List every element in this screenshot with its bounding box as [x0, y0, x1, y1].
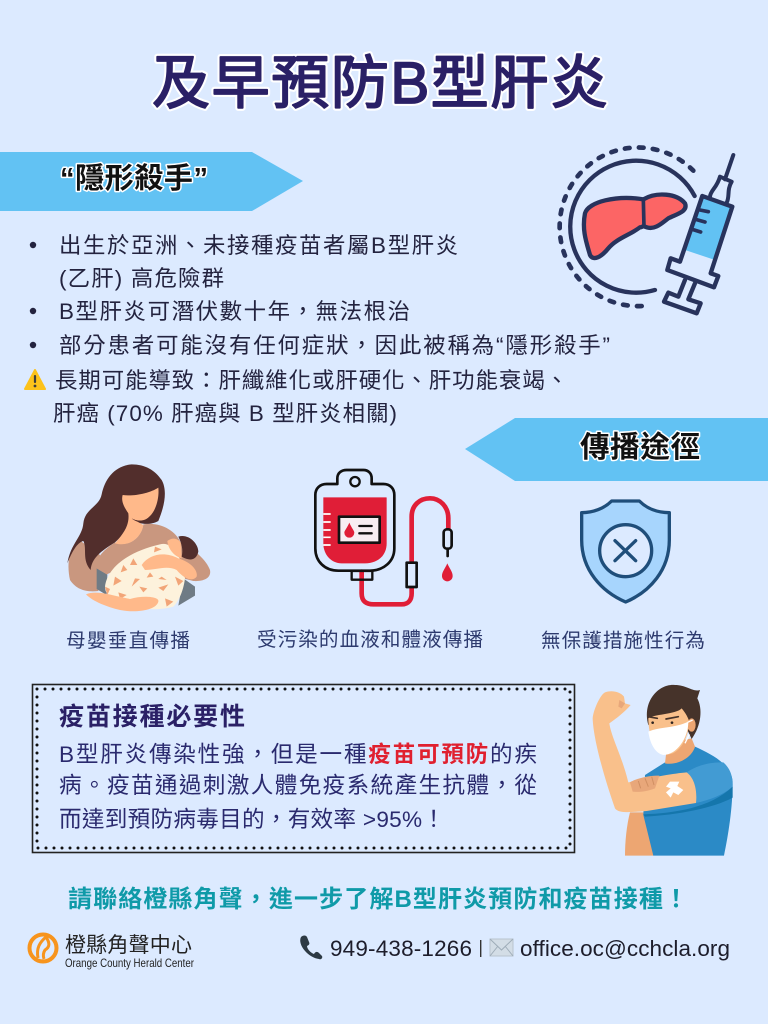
banner: transmission routes: 傳播途徑 [580, 431, 700, 464]
title: 及早預防B型肝炎 [152, 51, 608, 116]
panel body text: B型肝炎傳染性強，但是一種疫苗可預防的疾 [59, 742, 537, 767]
separator [480, 940, 481, 957]
bullet list: 部分患者可能沒有任何症狀，因此被稱為“隱形殺手” [59, 333, 610, 358]
icon: phone [300, 936, 322, 959]
bullet list: B型肝炎可潛伏數十年，無法根治 [59, 299, 410, 324]
icon: warning sign [25, 370, 45, 389]
warning text: 長期可能導致：肝纖維化或肝硬化、肝功能衰竭、 [55, 368, 568, 393]
bullet list: (乙肝) 高危險群 [59, 266, 224, 291]
caption: contaminated blood: 受污染的血液和體液傳播 [257, 629, 483, 651]
call to action: 請聯絡橙縣角聲，進一步了解B型肝炎預防和疫苗接種！ [68, 885, 688, 913]
icon: shield with cross [582, 501, 669, 602]
panel heading: 疫苗接種必要性 [59, 703, 245, 731]
logo: Orange County Herald Center [30, 934, 194, 970]
caption: unprotected sex: 無保護措施性行為 [541, 630, 705, 652]
banner: invisible killer [0, 152, 303, 211]
icon: blood bag [315, 470, 453, 604]
panel body text: 而達到預防病毒目的，有效率 >95%！ [59, 807, 445, 832]
logo mark [30, 934, 56, 962]
icon: envelope [490, 939, 513, 956]
bullet list: 出生於亞洲、未接種疫苗者屬B型肝炎 [59, 233, 458, 258]
caption: mother to child: 母嬰垂直傳播 [66, 630, 190, 652]
bullet list [30, 233, 610, 358]
warning text [53, 368, 568, 426]
icon: vaccinated man [593, 685, 733, 856]
text: 及早預防B型肝炎 [152, 51, 608, 116]
logo text: 橙縣角聲中心 [65, 934, 192, 957]
icon: mother and baby [67, 464, 210, 611]
warning text: 肝癌 (70% 肝癌與 B 型肝炎相關) [53, 401, 397, 426]
phone number: 949-438-1266 [330, 936, 472, 961]
banner: invisible killer: “隱形殺手” [60, 162, 208, 195]
email address: office.oc@cchcla.org [520, 936, 730, 961]
panel body text: 病。疫苗通過刺激人體免疫系統產生抗體，從 [59, 773, 537, 798]
panel body text [59, 742, 537, 832]
logo: Orange County Herald Center: Orange County Herald Center [65, 956, 194, 970]
panel: vaccination necessity [32, 684, 574, 852]
icon: liver and syringe [560, 147, 733, 313]
banner: transmission routes [465, 418, 768, 481]
